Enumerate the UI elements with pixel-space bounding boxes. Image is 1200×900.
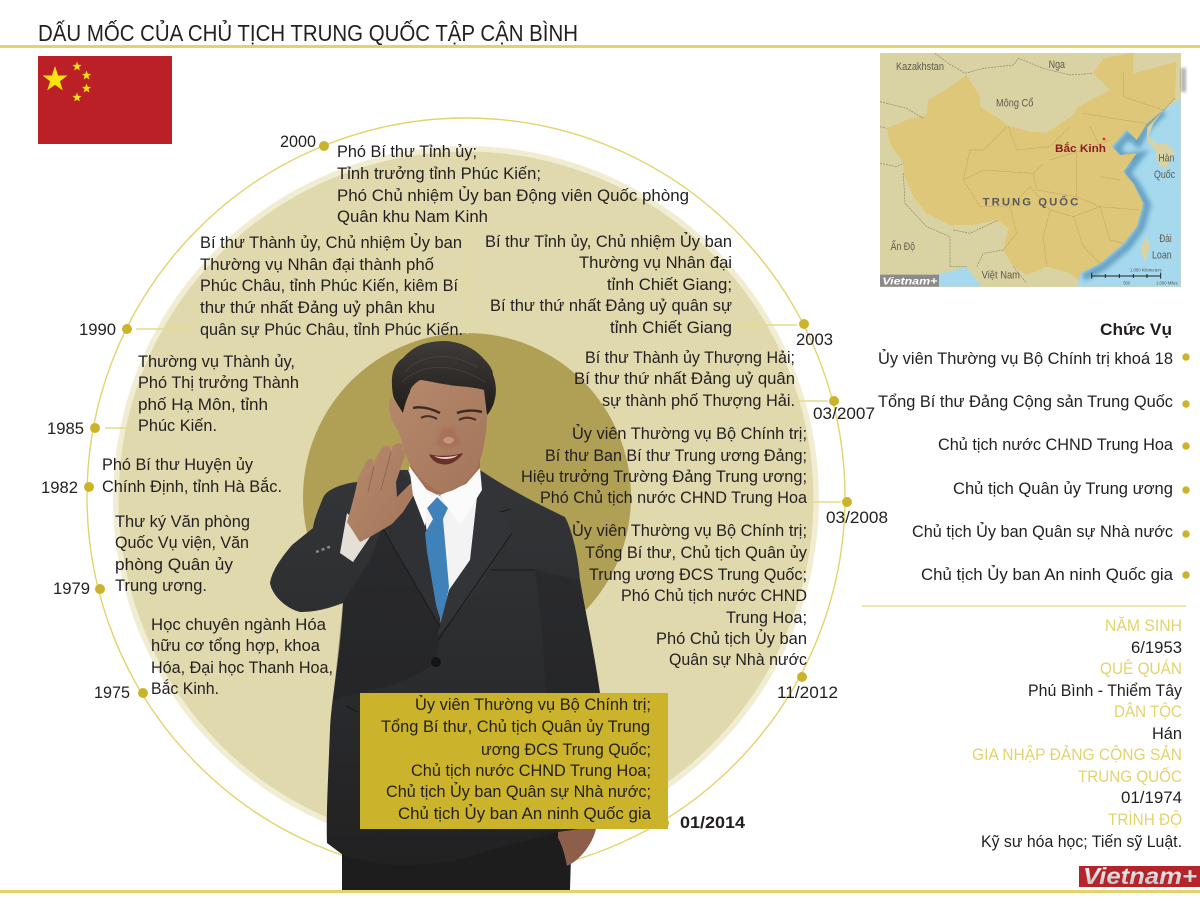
milestone 2003: Bí thư Tỉnh ủy, Chủ nhiệm Ủy ban	[485, 232, 732, 251]
milestone 1990: Thường vụ Nhân đại thành phố	[200, 256, 434, 274]
face	[389, 378, 487, 492]
timeline year labels: 1985	[47, 420, 84, 438]
collar	[409, 466, 440, 526]
biography panel: TRUNG QUỐC	[1078, 766, 1182, 786]
timeline year labels: 1990	[79, 321, 116, 339]
positions list: Chủ tịch Ủy ban An ninh Quốc gia	[921, 565, 1174, 584]
map labels: Đài	[1159, 233, 1172, 245]
milestone 03/2007: Bí thư thứ nhất Đảng uỷ quân	[574, 370, 795, 388]
milestone 1975: hữu cơ tổng hợp, khoa	[151, 637, 321, 655]
milestone 11/2012: Trung ương ĐCS Trung Quốc;	[589, 566, 807, 584]
milestone 11/2012: Ủy viên Thường vụ Bộ Chính trị;	[572, 521, 807, 540]
bottom rule	[0, 890, 1200, 893]
timeline year labels: 1982	[41, 479, 78, 497]
milestone 2000: Tỉnh trưởng tỉnh Phúc Kiến;	[337, 165, 541, 183]
highlight box: 01/2014	[360, 693, 668, 829]
positions heading: Chức Vụ	[1100, 320, 1172, 339]
highlight box: 01/2014: Tổng Bí thư, Chủ tịch Quân ủy Trung	[381, 718, 650, 736]
positions list	[878, 349, 1174, 584]
milestone 11/2012: Phó Chủ tịch nước CHND	[621, 587, 807, 605]
milestone 1979: Thư ký Văn phòng	[115, 513, 250, 531]
arm shading	[333, 527, 440, 700]
connector lines	[105, 232, 841, 502]
milestone 2003: Bí thư thứ nhất Đảng uỷ quân sự	[490, 297, 732, 315]
hair	[392, 341, 496, 415]
milestone 1975: Bắc Kinh.	[151, 679, 219, 698]
milestone 1979: phòng Quân ủy	[115, 556, 234, 574]
timeline year labels: 03/2008	[826, 509, 888, 527]
milestone 2000: Phó Bí thư Tỉnh ủy;	[337, 143, 477, 161]
map labels: Bắc Kinh	[1055, 142, 1106, 155]
milestone 11/2012	[572, 521, 808, 669]
Taiwan	[1140, 237, 1150, 262]
biography panel: QUÊ QUÁN	[1100, 659, 1182, 678]
jacket button	[431, 657, 441, 667]
milestone 03/2008: Ủy viên Thường vụ Bộ Chính trị;	[572, 424, 807, 443]
biography panel: Phú Bình - Thiểm Tây	[1028, 682, 1183, 700]
positions list: Chủ tịch Ủy ban Quân sự Nhà nước	[912, 522, 1173, 541]
timeline dots	[84, 141, 852, 828]
map labels: TRUNG QUỐC	[983, 194, 1078, 208]
shirt	[408, 470, 480, 630]
facial features	[413, 407, 482, 465]
map logo	[880, 275, 939, 287]
milestone 11/2012: Trung Hoa;	[726, 609, 807, 627]
ocean	[1077, 98, 1181, 287]
milestone 03/2008: Phó Chủ tịch nước CHND Trung Hoa	[540, 489, 808, 507]
milestone 1979	[115, 513, 250, 595]
milestone 2000	[337, 143, 689, 226]
biography panel: GIA NHẬP ĐẢNG CỘNG SẢN	[972, 745, 1182, 764]
highlight box: 01/2014: Ủy viên Thường vụ Bộ Chính trị;	[415, 695, 651, 714]
milestone 1979: Quốc Vụ viện, Văn	[115, 534, 249, 552]
milestone 2003: Thường vụ Nhân đại	[579, 254, 732, 272]
south-west sea	[935, 267, 982, 287]
highlight box: 01/2014: Chủ tịch Ủy ban An ninh Quốc gia	[398, 804, 652, 823]
suit jacket	[270, 470, 600, 865]
milestone 1985: Phó Thị trưởng Thành	[138, 374, 299, 392]
milestone 1985: Thường vụ Thành ủy,	[138, 353, 295, 371]
map labels: Việt Nam	[982, 269, 1020, 281]
milestone 1990: Phúc Châu, tỉnh Phúc Kiến, kiêm Bí	[200, 277, 458, 295]
China landmass	[887, 53, 1177, 282]
biography panel: 01/1974	[1121, 789, 1182, 807]
milestone 1985: phố Hạ Môn, tỉnh	[138, 396, 268, 414]
milestone 1982	[102, 456, 282, 496]
positions list: Tổng Bí thư Đảng Cộng sản Trung Quốc	[878, 393, 1173, 411]
province borders	[963, 73, 1163, 267]
milestone 2000: Quân khu Nam Kinh	[337, 208, 488, 226]
biography panel: Hán	[1152, 725, 1182, 743]
waving hand	[347, 443, 418, 542]
portrait of Xi Jinping	[270, 341, 600, 890]
jacket lapels	[382, 470, 442, 640]
highlight box: 01/2014: Chủ tịch Ủy ban Quân sự Nhà nước;	[386, 782, 651, 801]
title: DẤU MỐC CỦA CHỦ TỊCH TRUNG QUỐC TẬP CẬN BÌNH	[38, 18, 578, 46]
scale bar	[1092, 267, 1178, 286]
milestone 1975: Học chuyên ngành Hóa	[151, 616, 327, 634]
biography panel: 6/1953	[1131, 639, 1182, 657]
positions list: Chủ tịch nước CHND Trung Hoa	[938, 436, 1174, 454]
milestone 1990: quân sự Phúc Châu, tỉnh Phúc Kiến.	[200, 321, 463, 339]
position bullets	[1182, 353, 1190, 579]
map labels: Loan	[1152, 250, 1172, 262]
Korean peninsula	[1147, 111, 1175, 168]
biography panel: TRÌNH ĐỘ	[1108, 810, 1182, 829]
timeline year labels: 2000	[280, 133, 316, 151]
scale bar: 1.000 Kilometers	[1130, 267, 1162, 272]
milestone 1990	[200, 233, 463, 339]
milestone 11/2012: Tổng Bí thư, Chủ tịch Quân ủy	[585, 544, 808, 562]
Vietnam+ logo: Vietnam+	[1083, 863, 1197, 889]
biography panel: Kỹ sư hóa học; Tiến sỹ Luật.	[981, 833, 1182, 851]
milestone 03/2007: Bí thư Thành ủy Thượng Hải;	[585, 349, 795, 367]
milestone 03/2008: Bí thư Ban Bí thư Trung ương Đảng;	[545, 447, 807, 465]
highlight box: 01/2014: ương ĐCS Trung Quốc;	[481, 741, 651, 759]
map labels: Quốc	[1154, 169, 1175, 181]
shirt cuff	[340, 513, 370, 562]
milestone 1975	[151, 616, 333, 698]
biography panel: DÂN TỘC	[1114, 702, 1182, 721]
positions panel	[878, 320, 1190, 584]
timeline year labels: 11/2012	[777, 684, 838, 702]
milestone 1990: thư thứ nhất Đảng uỷ phân khu	[200, 299, 435, 317]
country borders	[880, 53, 1175, 283]
title rule	[0, 45, 1200, 48]
flag of China	[38, 56, 172, 144]
timeline year labels: 01/2014	[680, 814, 746, 832]
milestone 11/2012: Phó Chủ tịch Ủy ban	[656, 629, 807, 648]
milestone 1979: Trung ương.	[115, 577, 207, 595]
sleeve buttons	[316, 546, 332, 552]
milestone 2003: tỉnh Chiết Giang;	[607, 276, 732, 294]
scale bar: 1.000 Miles	[1156, 281, 1178, 286]
biography panel: NĂM SINH	[1105, 616, 1182, 635]
milestone 03/2008	[521, 424, 808, 507]
positions list: Chủ tịch Quân ủy Trung ương	[953, 480, 1173, 498]
map of China	[880, 53, 1186, 287]
positions list: Ủy viên Thường vụ Bộ Chính trị khoá 18	[878, 349, 1173, 368]
milestone 11/2012: Quân sự Nhà nước	[669, 651, 807, 669]
map labels: Mông Cổ	[996, 97, 1033, 109]
neck	[408, 455, 480, 500]
timeline year labels	[41, 133, 888, 832]
timeline year labels: 1979	[53, 580, 90, 598]
trousers	[342, 820, 572, 890]
milestone 1990: Bí thư Thành ủy, Chủ nhiệm Ủy ban	[200, 233, 462, 252]
milestone 1982: Phó Bí thư Huyện ủy	[102, 456, 254, 474]
right hand	[558, 829, 596, 866]
milestone 03/2007	[574, 349, 795, 410]
timeline ring	[87, 118, 845, 876]
Beijing marker	[1103, 138, 1105, 140]
timeline year labels: 1975	[94, 684, 130, 702]
necktie	[425, 497, 449, 624]
map logo: Vietnam+	[882, 276, 937, 287]
coastal shadow	[1083, 112, 1163, 277]
milestone 1982: Chính Định, tỉnh Hà Bắc.	[102, 477, 282, 496]
milestone 2003	[485, 232, 732, 337]
biography panel	[972, 616, 1183, 851]
scale bar: 500	[1123, 281, 1131, 286]
map labels: Ấn Độ	[891, 240, 915, 253]
milestone 1975: Hóa, Đại học Thanh Hoa,	[151, 659, 333, 677]
map labels: Nga	[1049, 59, 1066, 71]
timeline year labels: 2003	[796, 331, 833, 349]
milestone 2003: tỉnh Chiết Giang	[610, 319, 732, 337]
milestone 2000: Phó Chủ nhiệm Ủy ban Động viên Quốc phòng	[337, 186, 689, 205]
milestone 1985: Phúc Kiến.	[138, 417, 217, 435]
milestone 03/2007: sự thành phố Thượng Hải.	[602, 392, 795, 410]
milestone 03/2008: Hiệu trưởng Trường Đảng Trung ương;	[521, 468, 807, 486]
map labels: Hàn	[1158, 153, 1174, 165]
map labels	[891, 59, 1175, 281]
milestone 1985	[138, 353, 299, 435]
highlight box: 01/2014: Chủ tịch nước CHND Trung Hoa;	[411, 762, 651, 780]
timeline year labels: 03/2007	[813, 405, 875, 423]
map labels: Kazakhstan	[896, 61, 944, 73]
timeline discs	[113, 146, 819, 852]
